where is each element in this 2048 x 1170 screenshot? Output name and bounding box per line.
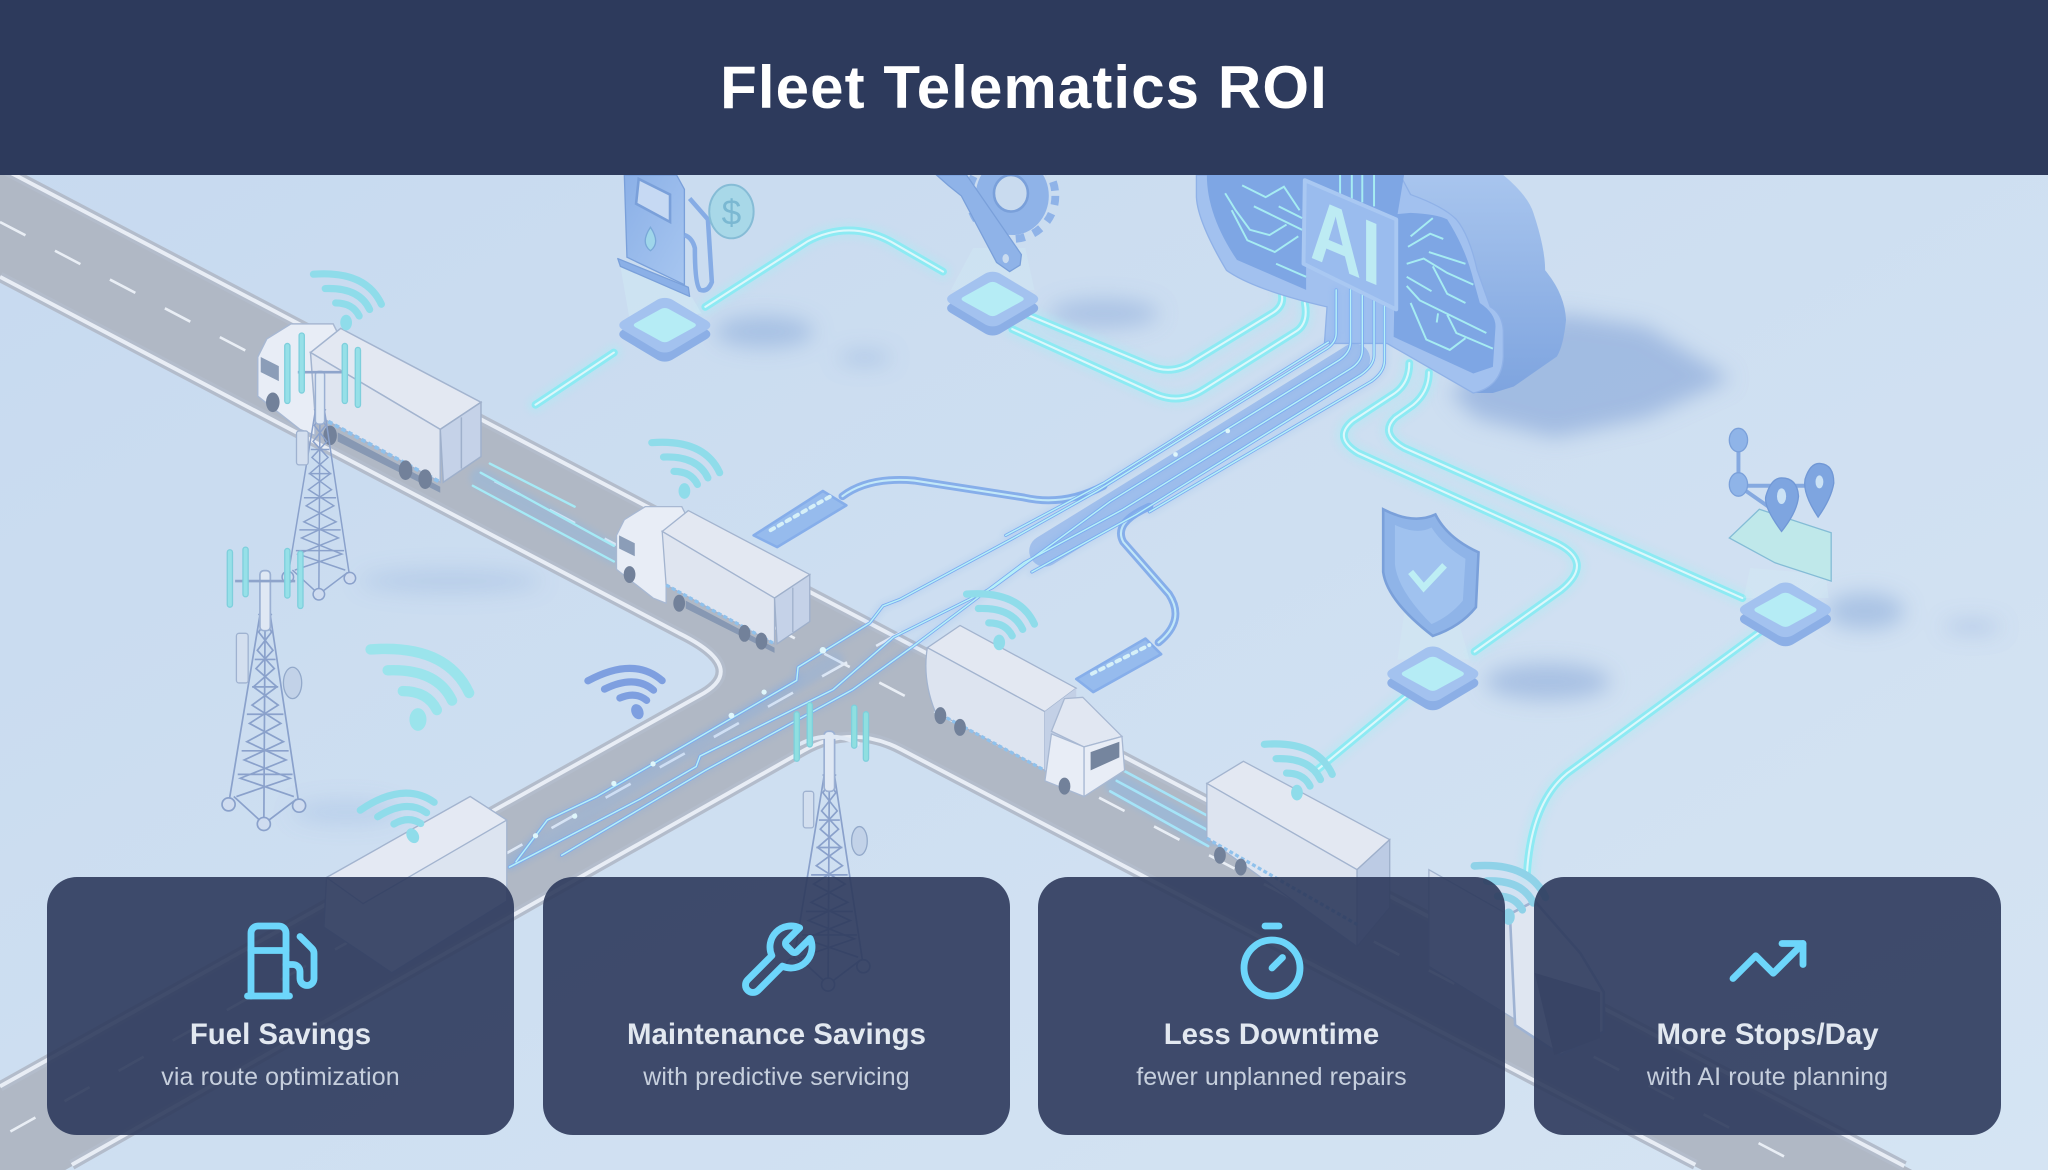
cable: truck sensors to bundle (754, 480, 1175, 692)
truck 3 (926, 625, 1125, 797)
wifi signals (313, 274, 1546, 925)
cell tower 1 (282, 333, 360, 600)
cell tower 3 (786, 703, 870, 991)
title: Fleet Telematics ROI (720, 54, 1328, 121)
heading: Less Downtime (1164, 1018, 1379, 1051)
dollar coin: $ (722, 194, 742, 233)
circuit traces (1225, 175, 1493, 350)
icon: stopwatch (1240, 922, 1304, 1000)
header band (0, 0, 2048, 175)
shield node (1383, 509, 1483, 713)
route map node (1729, 428, 1835, 649)
panel: less downtime (1038, 877, 1505, 1135)
panel: fuel savings (47, 877, 514, 1135)
data trails on roads (473, 464, 1208, 862)
dollar coin (709, 185, 754, 238)
heading: Fuel Savings (190, 1018, 371, 1051)
truck 5 (324, 797, 507, 973)
description: fewer unplanned repairs (1136, 1063, 1407, 1091)
ground shadows (291, 299, 2001, 824)
icon: fuel pump (244, 922, 318, 1000)
maintenance node (936, 153, 1055, 338)
truck 4 (1207, 761, 1390, 947)
cell tower 2 (222, 547, 306, 830)
truck 1 (258, 324, 481, 493)
heading: Maintenance Savings (627, 1018, 926, 1051)
truck 2 (616, 507, 810, 653)
heading: More Stops/Day (1656, 1018, 1879, 1051)
cyan fiber routes (536, 230, 1763, 875)
blue data bundle from cloud to road (509, 290, 1384, 867)
description: with predictive servicing (643, 1063, 910, 1091)
panel: more stops per day (1534, 877, 2001, 1135)
icon: trending up arrow (1730, 940, 1806, 982)
fuel station node (615, 175, 754, 364)
panel: maintenance savings (543, 877, 1010, 1135)
truck 6 (1429, 870, 1604, 1055)
AI cloud body (1196, 175, 1566, 393)
icon: wrench (742, 922, 816, 996)
AI chip: AI (1310, 177, 1381, 306)
description: via route optimization (161, 1063, 400, 1091)
description: with AI route planning (1647, 1063, 1888, 1091)
